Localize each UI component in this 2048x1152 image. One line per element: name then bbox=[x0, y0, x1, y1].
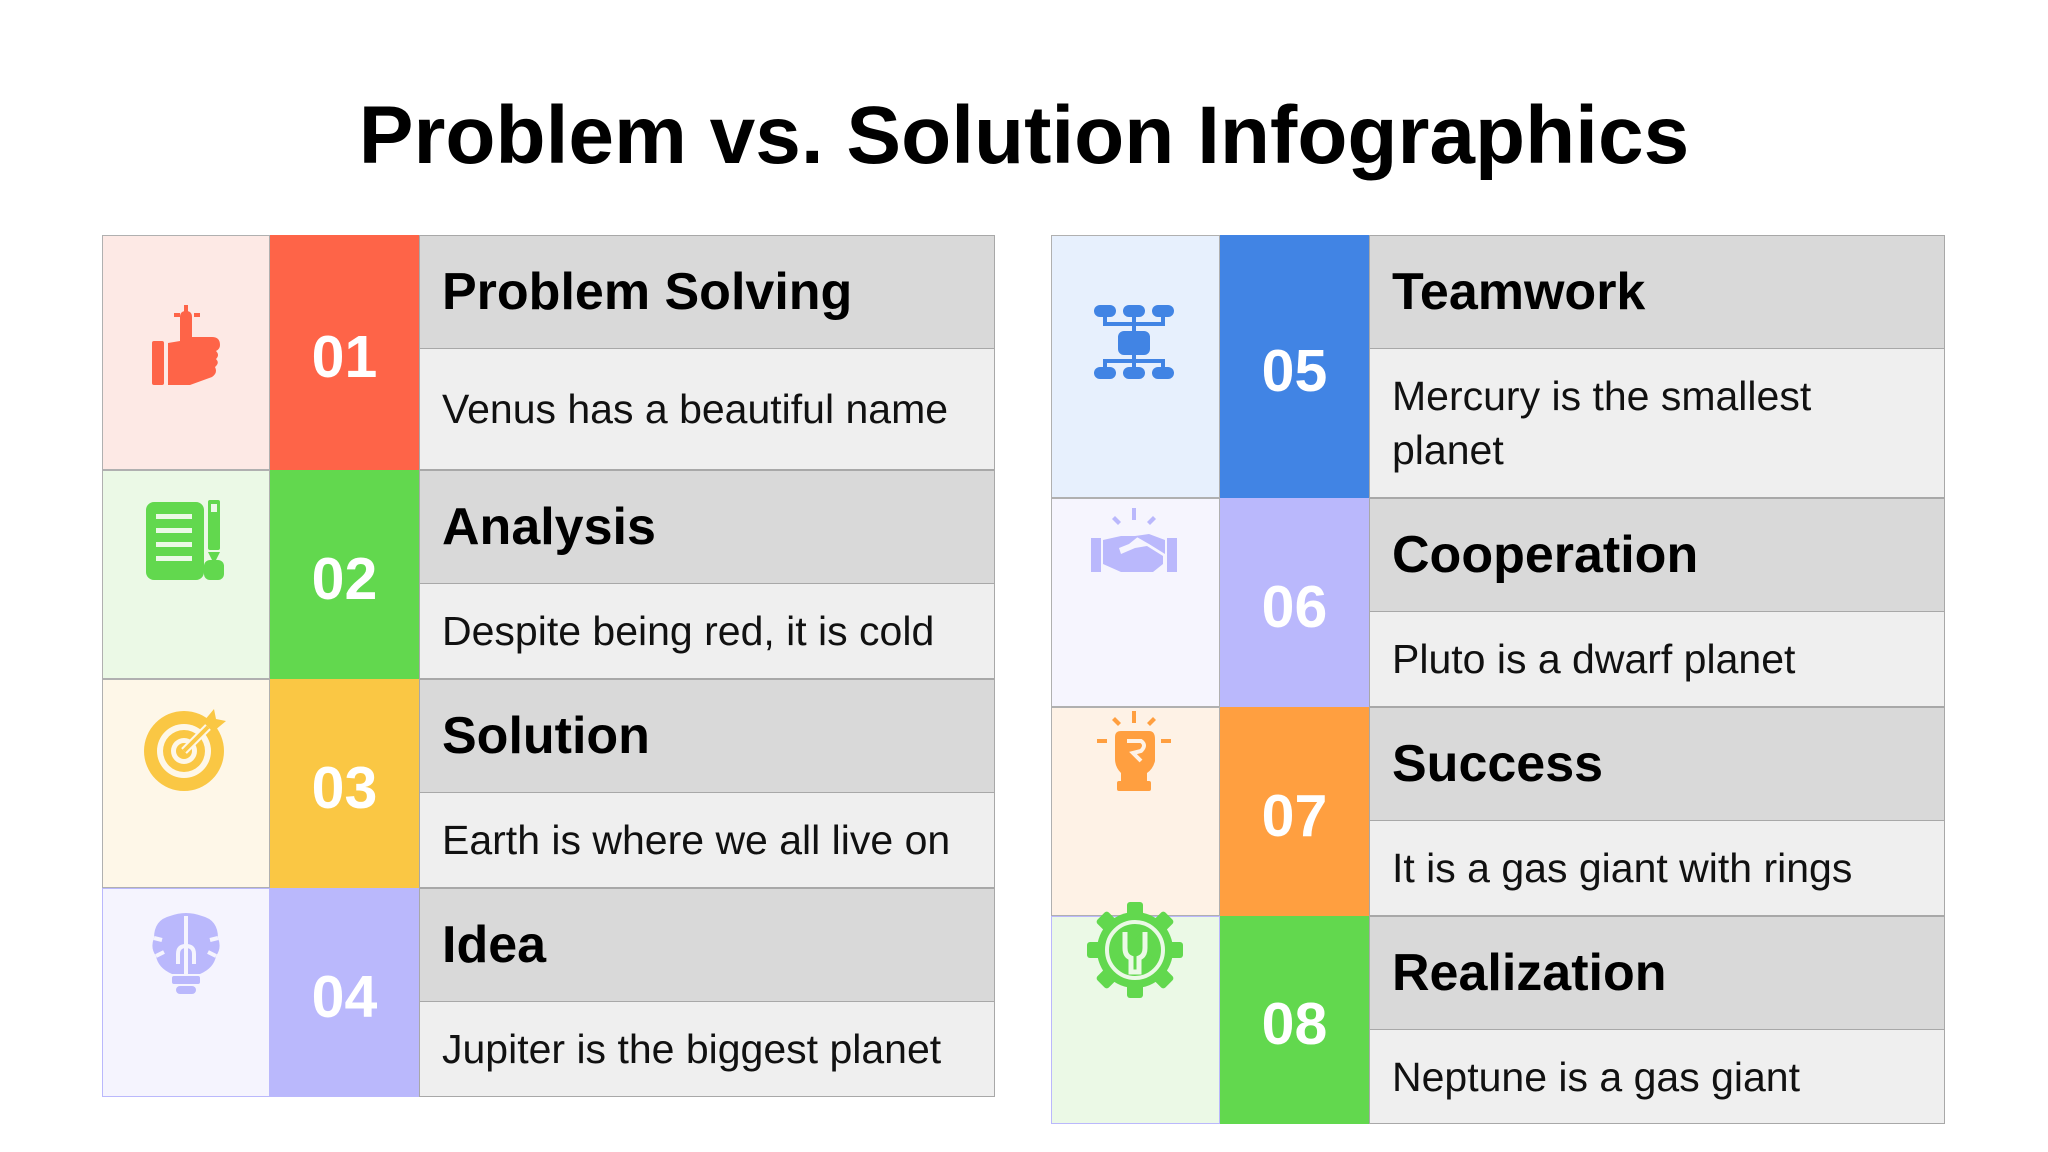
text bbox=[1369, 820, 1945, 916]
text: Jupiter is the biggest planet bbox=[442, 1026, 941, 1072]
number 08 bbox=[1220, 916, 1369, 1124]
row 08 bbox=[1051, 902, 1945, 1124]
number 04: 04 bbox=[312, 964, 377, 1030]
text: Neptune is a gas giant bbox=[1392, 1054, 1800, 1100]
number 03 bbox=[270, 679, 419, 888]
text bbox=[1369, 611, 1945, 707]
number 06: 06 bbox=[1262, 574, 1327, 640]
heading bbox=[1369, 916, 1945, 1030]
icon: target bbox=[144, 709, 226, 791]
heading bbox=[1369, 707, 1945, 821]
heading bbox=[419, 888, 995, 1002]
icon: handshake bbox=[1091, 508, 1177, 572]
number 01 bbox=[270, 235, 419, 470]
text: Mercury is the smallest bbox=[1392, 373, 1811, 419]
icon: thumbs up bbox=[152, 305, 220, 385]
heading: Analysis bbox=[442, 498, 656, 556]
text bbox=[1369, 1029, 1945, 1124]
icon: network bbox=[1094, 305, 1174, 379]
row 05 bbox=[1051, 235, 1945, 498]
heading: Success bbox=[1392, 735, 1603, 793]
number 02: 02 bbox=[312, 546, 377, 612]
heading: Idea bbox=[442, 916, 546, 974]
row 01 bbox=[102, 235, 995, 470]
text: Pluto is a dwarf planet bbox=[1392, 636, 1795, 682]
number 02 bbox=[270, 470, 419, 679]
heading bbox=[1369, 498, 1945, 612]
text: Earth is where we all live on bbox=[442, 817, 950, 863]
heading: Cooperation bbox=[1392, 526, 1698, 584]
text: planet bbox=[1392, 427, 1504, 473]
number 07 bbox=[1220, 707, 1369, 916]
icon: fist bbox=[1097, 711, 1171, 791]
row 07 bbox=[1051, 707, 1945, 916]
panel: right bbox=[1051, 235, 1945, 1124]
row 06 bbox=[1051, 498, 1945, 707]
row 02 bbox=[102, 470, 995, 679]
panel: left bbox=[102, 235, 995, 1097]
heading: Problem Solving bbox=[442, 263, 852, 321]
number 05 bbox=[1220, 235, 1369, 498]
number 04 bbox=[270, 888, 419, 1097]
heading: Realization bbox=[1392, 944, 1666, 1002]
icon: document bbox=[146, 500, 224, 580]
text bbox=[419, 792, 995, 888]
row 03 bbox=[102, 679, 995, 888]
icon: gear bbox=[1087, 902, 1183, 998]
heading: Solution bbox=[442, 707, 650, 765]
number 08: 08 bbox=[1262, 991, 1327, 1057]
heading: Teamwork bbox=[1392, 263, 1645, 321]
heading bbox=[1369, 235, 1945, 349]
heading bbox=[419, 470, 995, 584]
number 01: 01 bbox=[312, 324, 377, 390]
row 04 bbox=[102, 888, 995, 1097]
icon: brain bulb bbox=[152, 913, 220, 994]
text: It is a gas giant with rings bbox=[1392, 845, 1852, 891]
text bbox=[419, 1001, 995, 1097]
text: Despite being red, it is cold bbox=[442, 608, 934, 654]
number 05: 05 bbox=[1262, 338, 1327, 404]
heading bbox=[419, 235, 995, 349]
text bbox=[419, 348, 995, 470]
text bbox=[419, 583, 995, 679]
number 06 bbox=[1220, 498, 1369, 707]
text bbox=[1369, 348, 1945, 498]
title: Problem vs. Solution Infographics bbox=[359, 90, 1689, 181]
number 03: 03 bbox=[312, 754, 377, 820]
heading bbox=[419, 679, 995, 793]
text: Venus has a beautiful name bbox=[442, 386, 948, 432]
number 07: 07 bbox=[1262, 782, 1327, 848]
